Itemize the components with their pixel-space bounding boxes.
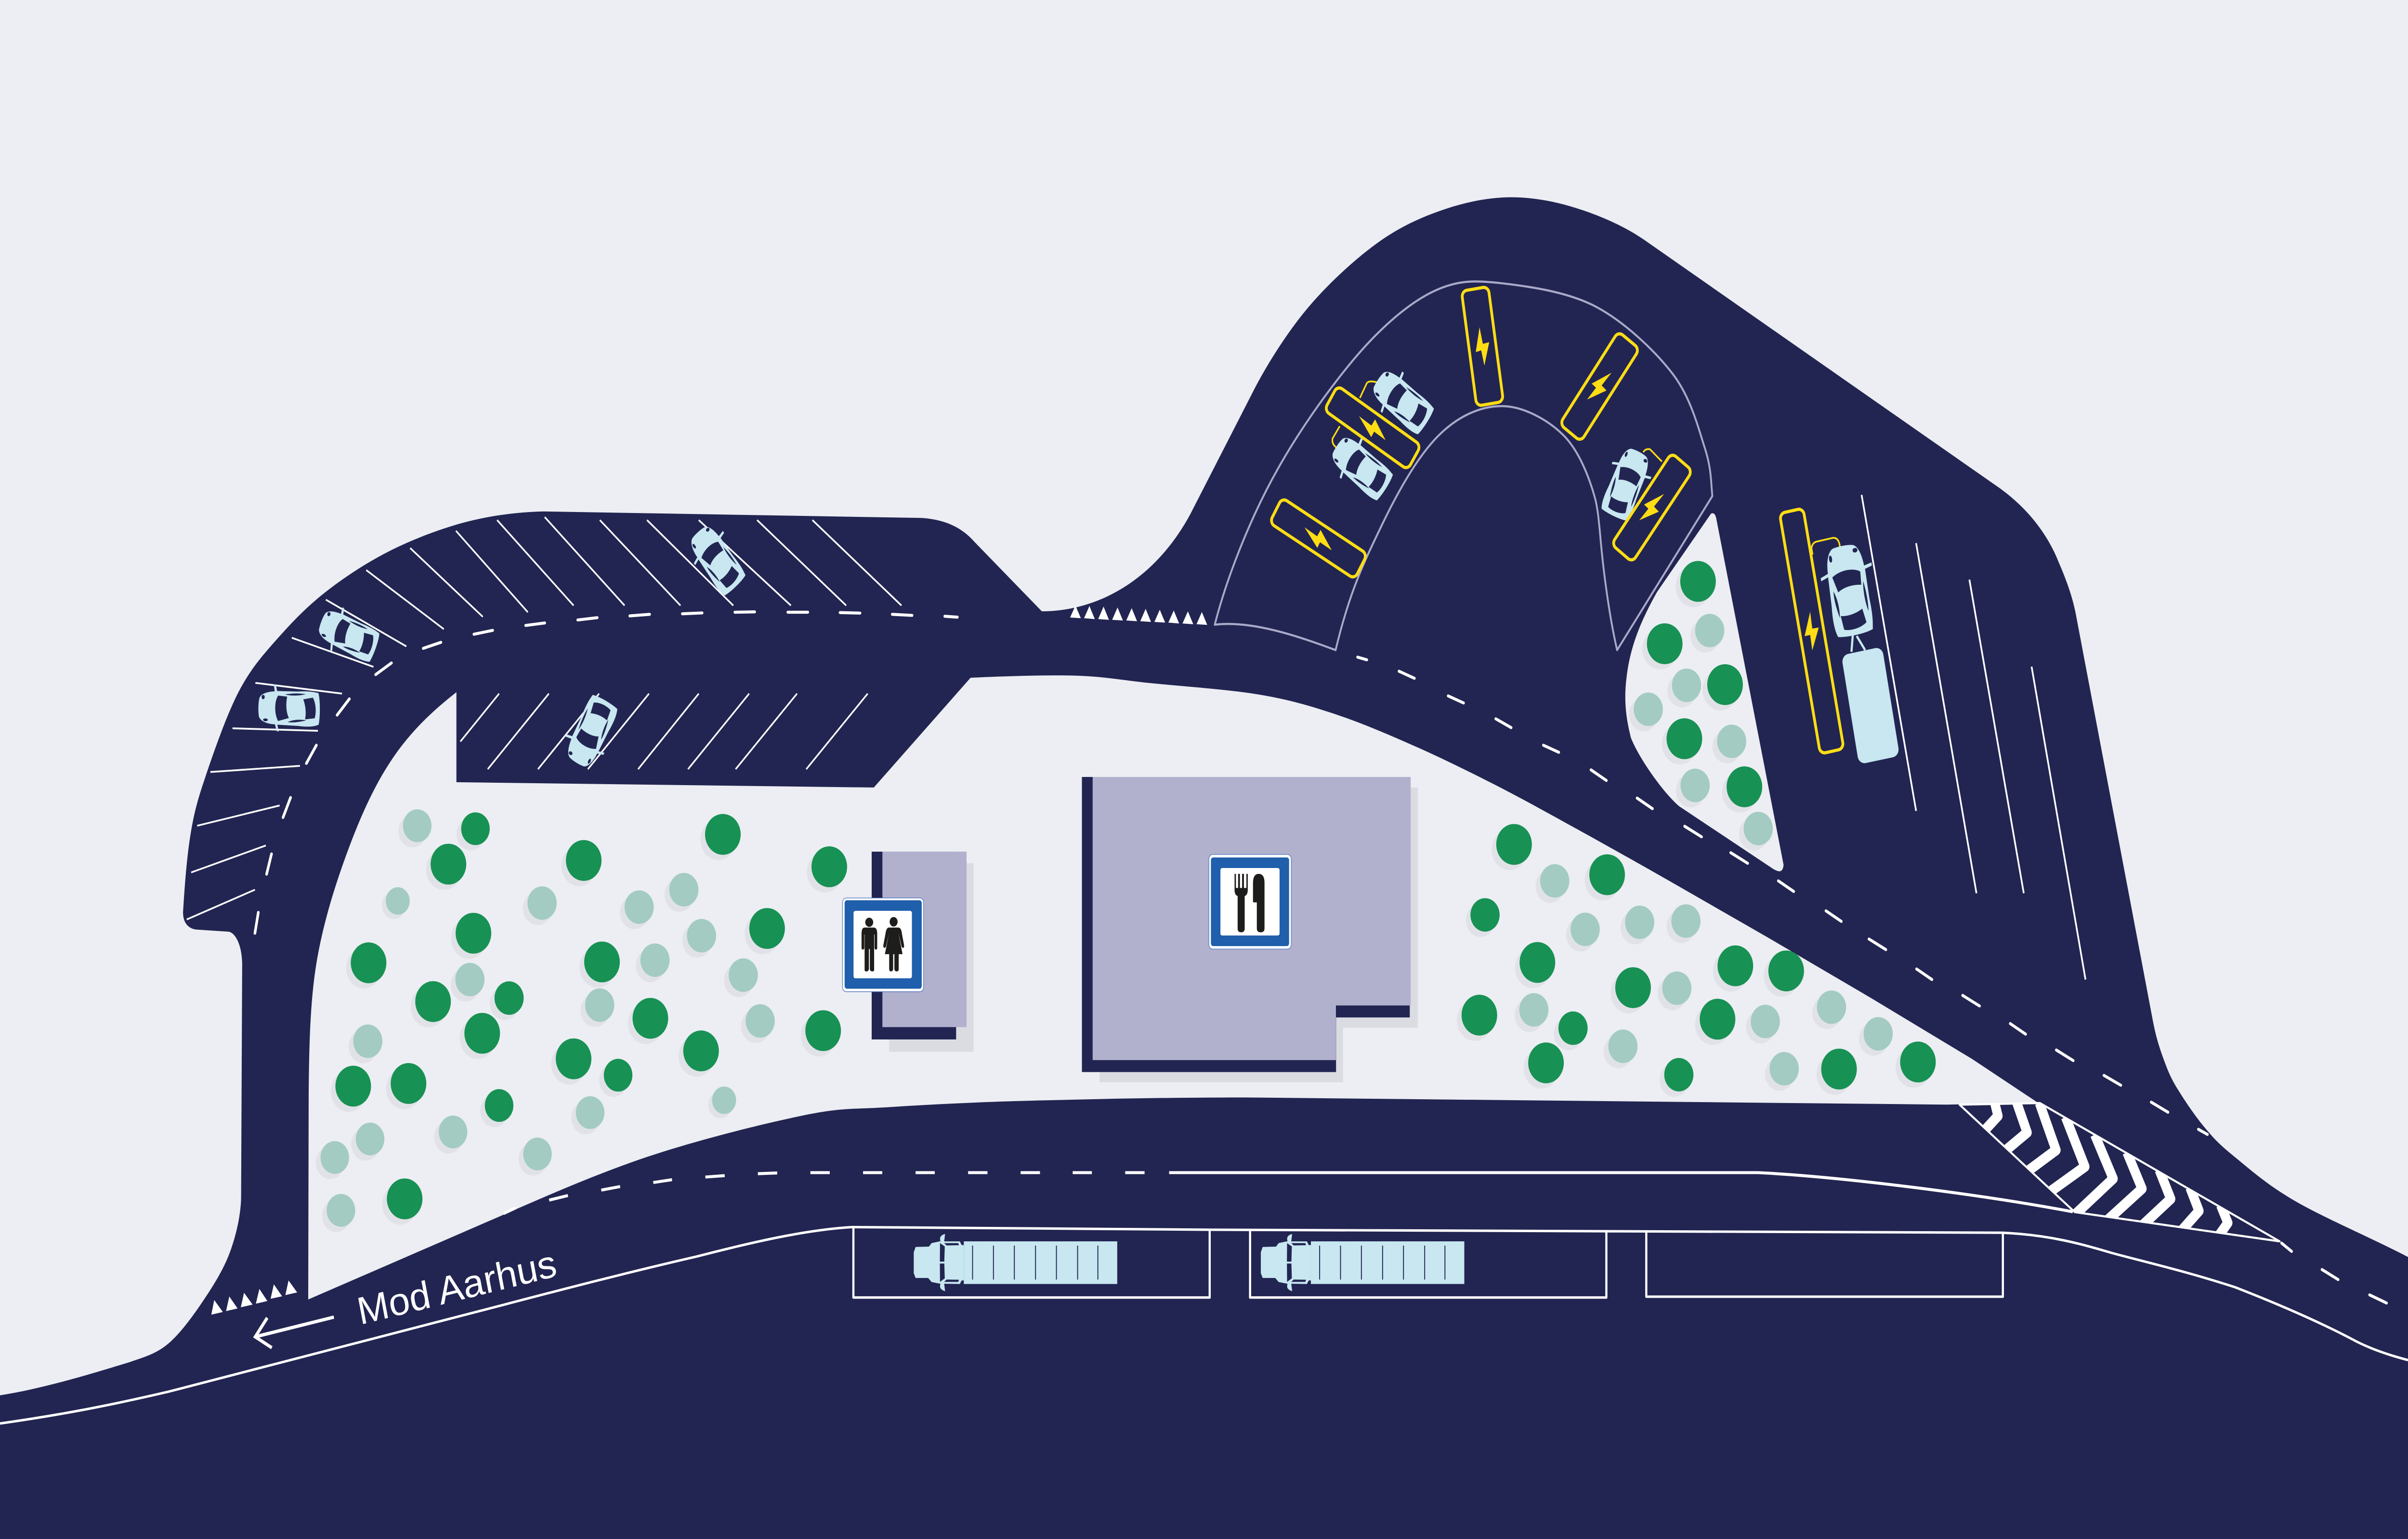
south parking lines	[460, 694, 868, 769]
north parking lines	[187, 517, 902, 920]
parked cars	[258, 518, 751, 774]
centre dashes, west loop	[255, 612, 957, 933]
toilet building	[872, 852, 974, 1052]
arrow: towards Aarhus	[255, 1317, 334, 1348]
charging cables	[1333, 381, 1840, 554]
toilet sign	[842, 898, 924, 992]
chevron hatching	[1960, 1103, 2279, 1244]
car	[559, 690, 624, 774]
charging bay 2	[1560, 331, 1639, 442]
parked car at charger	[1595, 442, 1658, 526]
west trees	[316, 809, 847, 1232]
restaurant building	[1082, 777, 1418, 1082]
parked car at charger	[1365, 361, 1439, 441]
main green island	[308, 675, 2038, 1300]
truck 2	[1261, 1234, 1464, 1291]
parked car at charger	[1324, 427, 1398, 507]
right parking lines	[1861, 495, 2085, 980]
restaurant sign	[1209, 855, 1291, 949]
small island trees	[1629, 561, 1773, 851]
east trees	[1457, 824, 1936, 1097]
charging bays	[1269, 287, 1844, 754]
road label: Mod Aarhus	[353, 1242, 560, 1333]
yield triangles, centre	[1070, 605, 1207, 625]
lane line, dashes and solid	[504, 1172, 2073, 1213]
charging bay 6 caravan	[1780, 508, 1844, 754]
small green island	[1625, 513, 1783, 871]
truck 1	[914, 1234, 1117, 1291]
car	[314, 601, 383, 670]
charging bay 4	[1269, 498, 1367, 579]
charging area outline	[1215, 281, 1712, 650]
car	[682, 518, 751, 601]
car	[258, 684, 321, 733]
charging bay 1	[1462, 287, 1504, 406]
charging bay 5	[1611, 453, 1692, 562]
truck bays and road edge line	[0, 1227, 2408, 1423]
centre dashes, east road	[1358, 657, 2386, 1303]
yield triangles, exit	[211, 1280, 297, 1315]
charging bay 3	[1324, 386, 1421, 470]
car with caravan	[1817, 541, 1900, 764]
